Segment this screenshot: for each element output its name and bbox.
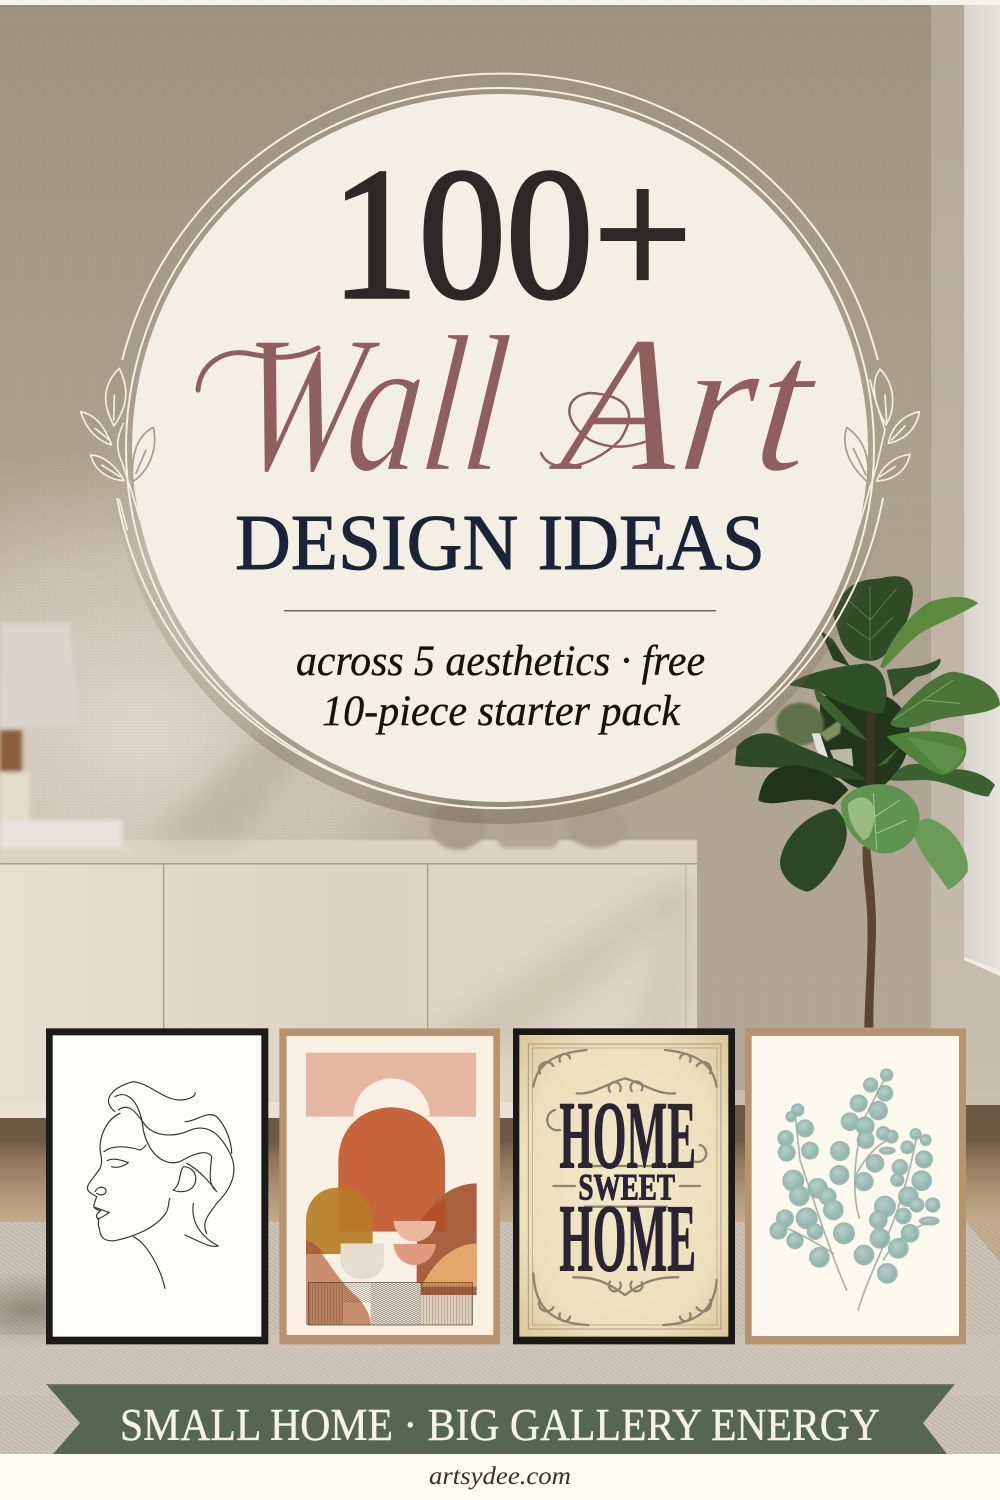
subheading: across 5 aesthetics · free [296,638,705,685]
green ribbon banner [46,1384,955,1454]
divider line [284,610,716,612]
frame 3: Home Sweet Home poster: HOME [559,1082,696,1189]
wall shadow streaks [150,700,330,840]
heading: 100+: 100+ [331,129,692,338]
cream circle [132,94,868,802]
vases on sideboard [430,800,627,850]
sideboard cabinet [0,840,697,1118]
corner flourishes [533,1050,717,1325]
frame 3: Home Sweet Home poster: HOME [559,1185,696,1292]
right laurel sprig [845,369,919,563]
heading: Wall Art script [198,295,827,513]
banner text: SMALL HOME · BIG GALLERY ENERGY [120,1400,880,1450]
website credit: artsydee.com [429,1463,571,1490]
frame 4: eucalyptus botanical print [745,1028,966,1344]
eucalyptus leaves [770,1069,939,1283]
face line drawing [87,1082,234,1288]
frame 2: boho abstract print [279,1028,500,1344]
subheading: 10-piece starter pack [322,688,681,735]
fiddle leaf fig plant [735,576,1000,1028]
heading: DESIGN IDEAS: DESIGN IDEAS [235,500,765,587]
frame 3: Home Sweet Home poster [513,1028,735,1344]
eucalyptus stems [783,1075,933,1310]
stacked books [0,820,122,848]
title medallion [81,72,919,824]
frame 1: line art portrait [46,1028,268,1344]
footer strip [0,1454,1000,1500]
poster lettering [559,1082,696,1292]
heading: Wall Art script: Wall [227,295,518,513]
subheading [296,638,705,735]
left laurel sprig [81,368,155,530]
rug [0,1222,1000,1500]
poster lettering: SWEET [578,1167,675,1208]
table lamp [0,623,78,822]
heading: Wall Art script: Art [543,295,827,513]
floor [0,1105,1000,1225]
inner ring [126,88,874,808]
outer ring [117,74,883,808]
